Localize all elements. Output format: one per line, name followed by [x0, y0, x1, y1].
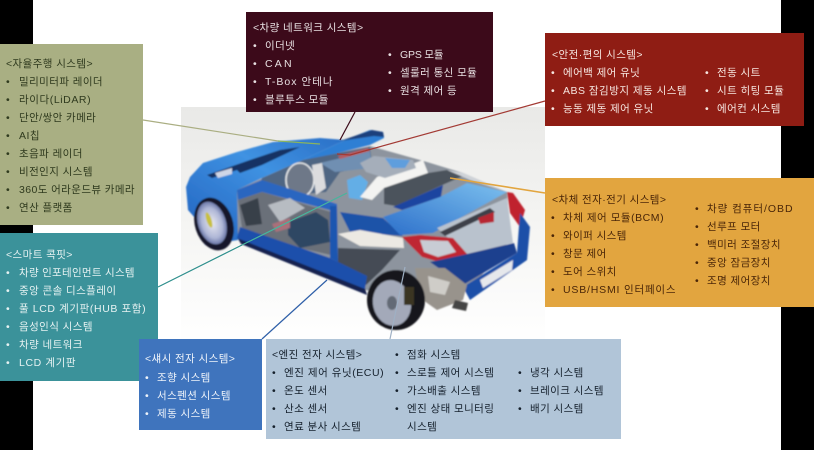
list: smart cockpit items: 음성인식 시스템: [19, 321, 93, 333]
list: engine column 1: [272, 367, 384, 433]
list: autonomous driving items: 연산 플랫폼: [19, 202, 73, 214]
list: engine column 3: [518, 367, 604, 415]
list: vehicle network column 2: 원격 제어 등: [400, 84, 457, 97]
list: smart cockpit items: 차량 인포테인먼트 시스템: [19, 267, 135, 279]
tail light right: [507, 192, 525, 227]
list: autonomous driving items: 라이다(LiDAR): [19, 94, 91, 106]
list: engine column 1: •: [272, 385, 276, 397]
list: smart cockpit items: LCD 계기판: [19, 357, 76, 369]
heading: safety and convenience: <안전·편의 시스템>: [552, 48, 643, 61]
list: vehicle network column 1: •: [253, 58, 257, 70]
list: engine column 2: •: [395, 367, 399, 379]
list: safety column 1: ABS 잠김방지 제동 시스템: [563, 85, 687, 97]
heading: vehicle network: <차량 네트워크 시스템>: [253, 21, 364, 34]
list: body electronics column 2: •: [695, 275, 699, 287]
list: safety column 2: •: [705, 67, 709, 79]
list: autonomous driving items: •: [6, 148, 10, 160]
panel: safety and convenience system: [545, 33, 804, 126]
list: engine column 3: •: [518, 403, 522, 415]
list: smart cockpit items: •: [6, 357, 10, 369]
white rear seat: [360, 160, 428, 200]
list: smart cockpit items: 중앙 콘솔 디스플레이: [19, 285, 116, 297]
connector lines: [143, 101, 545, 339]
list: vehicle network column 1: 블루투스 모듈: [265, 94, 329, 106]
list: engine column 2: [395, 349, 494, 433]
trunk lid: [383, 183, 507, 235]
list: body electronics column 1: •: [551, 230, 555, 242]
list: safety column 1: •: [551, 67, 555, 79]
list: autonomous driving items: •: [6, 202, 10, 214]
list: vehicle network column 2: •: [388, 67, 392, 79]
panel: autonomous driving system: [0, 44, 143, 225]
list: engine column 1: 연료 분사 시스템: [284, 421, 361, 433]
list: vehicle network column 1: T-Box 안테나: [265, 76, 333, 88]
list: autonomous driving items: •: [6, 166, 10, 178]
list: autonomous driving items: [6, 76, 135, 214]
heading: autonomous driving: <자율주행 시스템>: [6, 58, 93, 70]
sill: [237, 237, 367, 295]
windshield frame strip: [303, 130, 384, 165]
trunk interior: [437, 198, 513, 254]
list: body electronics column 1: 도어 스위치: [563, 265, 617, 278]
panel: body electronics system: [545, 178, 814, 307]
door pillar: [330, 206, 338, 262]
list: vehicle network column 2: •: [388, 49, 392, 61]
list: body electronics column 2: 중앙 잠금장치: [707, 257, 771, 269]
list: body electronics column 1: 와이퍼 시스템: [563, 230, 627, 242]
panel: chassis electronics system: [139, 339, 262, 430]
list: autonomous driving items: AI칩: [19, 130, 40, 142]
icon: front wheel: [188, 192, 240, 256]
list: safety column 1: •: [551, 103, 555, 115]
rear cabin and interior base: [236, 146, 510, 300]
list: engine column 3: 배기 시스템: [530, 403, 584, 415]
list: safety column 1: •: [551, 85, 555, 97]
list: smart cockpit items: [6, 267, 146, 369]
list: body electronics column 1: [551, 212, 676, 296]
list: engine column 2: 가스배출 시스템: [407, 385, 481, 397]
list: chassis items: •: [145, 390, 149, 402]
list: chassis items: [145, 372, 231, 420]
list: vehicle network column 1: 이더넷: [265, 40, 295, 52]
list: autonomous driving items: 초음파 레이더: [19, 148, 83, 160]
list: engine column 1: •: [272, 367, 276, 379]
list: vehicle network column 1: [253, 40, 333, 106]
list: smart cockpit items: 풀 LCD 계기판(HUB 포함): [19, 303, 146, 315]
rear bumper blue: [463, 213, 530, 300]
rear side panel: [340, 212, 403, 236]
list: body electronics column 2: •: [695, 257, 699, 269]
steering wheel: [286, 163, 314, 197]
list: autonomous driving items: 비전인지 시스템: [19, 166, 93, 178]
list: engine column 1: 엔진 제어 유닛(ECU): [284, 367, 384, 379]
list: engine column 3: •: [518, 385, 522, 397]
list: autonomous driving items: •: [6, 94, 10, 106]
list: engine column 1: •: [272, 403, 276, 415]
list: body electronics column 2: •: [695, 239, 699, 251]
belt line: [237, 180, 337, 212]
list: body electronics column 2: [695, 203, 793, 287]
list: vehicle network column 1: CAN: [265, 58, 292, 70]
list: smart cockpit items: •: [6, 267, 10, 279]
list: safety column 2: 에어컨 시스템: [717, 103, 781, 115]
panel: vehicle network system: [246, 12, 493, 112]
front door opening: [238, 192, 331, 255]
heading: body electronics: <차체 전자·전기 시스템>: [552, 194, 666, 206]
list: vehicle network column 2: GPS 모듈: [400, 49, 444, 61]
list: engine column 1: 온도 센서: [284, 385, 328, 397]
hood dark slits: [207, 147, 300, 178]
list: vehicle network column 1: •: [253, 76, 257, 88]
list: body electronics column 1: 창문 제어: [563, 248, 607, 260]
list: smart cockpit items: •: [6, 321, 10, 333]
list: vehicle network column 1: •: [253, 94, 257, 106]
list: autonomous driving items: •: [6, 184, 10, 196]
list: vehicle network column 2: 셀룰러 통신 모듈: [400, 67, 477, 79]
list: autonomous driving items: •: [6, 76, 10, 88]
exhaust: [415, 268, 467, 310]
list: safety column 2: 전동 시트: [717, 67, 761, 79]
list: engine column 2: •: [395, 385, 399, 397]
list: chassis items: 제동 시스템: [157, 408, 211, 420]
list: vehicle network column 2: [388, 49, 477, 97]
list: engine column 2: 점화 시스템: [407, 349, 461, 361]
list: engine column 1: 산소 센서: [284, 403, 328, 415]
dashboard: [258, 147, 372, 196]
list: body electronics column 2: 차량 컴퓨터/OBD: [707, 203, 793, 215]
heading: engine electronics: <엔진 전자 시스템>: [272, 349, 362, 361]
list: autonomous driving items: 단안/쌍안 카메라: [19, 112, 96, 124]
list: engine column 3: 브레이크 시스템: [530, 385, 604, 397]
list: chassis items: 서스펜션 시스템: [157, 390, 231, 402]
list: safety column 2: •: [705, 103, 709, 115]
list: safety column 1: [551, 67, 687, 115]
list: body electronics column 1: USB/HSMI 인터페이스: [563, 284, 676, 296]
car image background: [181, 107, 545, 345]
list: engine column 2: •: [395, 349, 399, 361]
list: chassis items: 조향 시스템: [157, 372, 211, 384]
list: engine column 2: 시스템: [407, 421, 437, 433]
icon: rear wheel: [367, 270, 425, 330]
list: body electronics column 2: •: [695, 203, 699, 215]
front fender and hood: [186, 138, 345, 245]
list: engine column 3: •: [518, 367, 522, 379]
list: autonomous driving items: •: [6, 130, 10, 142]
list: vehicle network column 2: •: [388, 85, 392, 97]
list: engine column 1: •: [272, 421, 276, 433]
list: body electronics column 1: •: [551, 212, 555, 224]
heading: smart cockpit: <스마트 콕핏>: [6, 249, 73, 261]
list: safety column 2: •: [705, 85, 709, 97]
panel: engine electronics system: [266, 339, 621, 439]
list: autonomous driving items: 360도 어라운드뷰 카메라: [19, 184, 135, 196]
engine bay: [384, 170, 463, 206]
list: body electronics column 1: •: [551, 248, 555, 260]
illustration: cutaway blue car: [186, 130, 530, 330]
list: engine column 3: 냉각 시스템: [530, 367, 584, 379]
list: engine column 2: 스로틀 제어 시스템: [407, 367, 494, 379]
list: engine column 2: 엔진 상태 모니터링: [407, 403, 494, 415]
list: autonomous driving items: 밀리미터파 레이더: [19, 76, 103, 88]
list: body electronics column 1: •: [551, 266, 555, 278]
list: body electronics column 2: 선루프 모터: [707, 221, 761, 233]
list: engine column 2: •: [395, 403, 399, 415]
panel: smart cockpit: [0, 233, 158, 381]
seat light blue: [347, 175, 368, 200]
list: autonomous driving items: •: [6, 112, 10, 124]
list: chassis items: •: [145, 408, 149, 420]
list: safety column 2: 시트 히팅 모듈: [717, 85, 784, 97]
list: smart cockpit items: •: [6, 285, 10, 297]
list: body electronics column 2: 조명 제어장치: [707, 275, 771, 287]
list: safety column 1: 에어백 제어 유닛: [563, 67, 640, 79]
list: safety column 1: 능동 제동 제어 유닛: [563, 103, 654, 115]
list: body electronics column 2: 백미러 조절장치: [707, 238, 781, 251]
list: chassis items: •: [145, 372, 149, 384]
driver seat: [288, 212, 330, 248]
heading: chassis electronics: <섀시 전자 시스템>: [145, 353, 235, 365]
list: smart cockpit items: •: [6, 303, 10, 315]
list: safety column 2: [705, 67, 784, 115]
list: vehicle network column 1: •: [253, 40, 257, 52]
list: body electronics column 1: •: [551, 284, 555, 296]
list: smart cockpit items: •: [6, 339, 10, 351]
list: body electronics column 2: •: [695, 221, 699, 233]
list: smart cockpit items: 차량 네트워크: [19, 338, 83, 351]
tail light left: [402, 235, 468, 263]
list: body electronics column 1: 차체 제어 모듈(BCM): [563, 212, 664, 224]
